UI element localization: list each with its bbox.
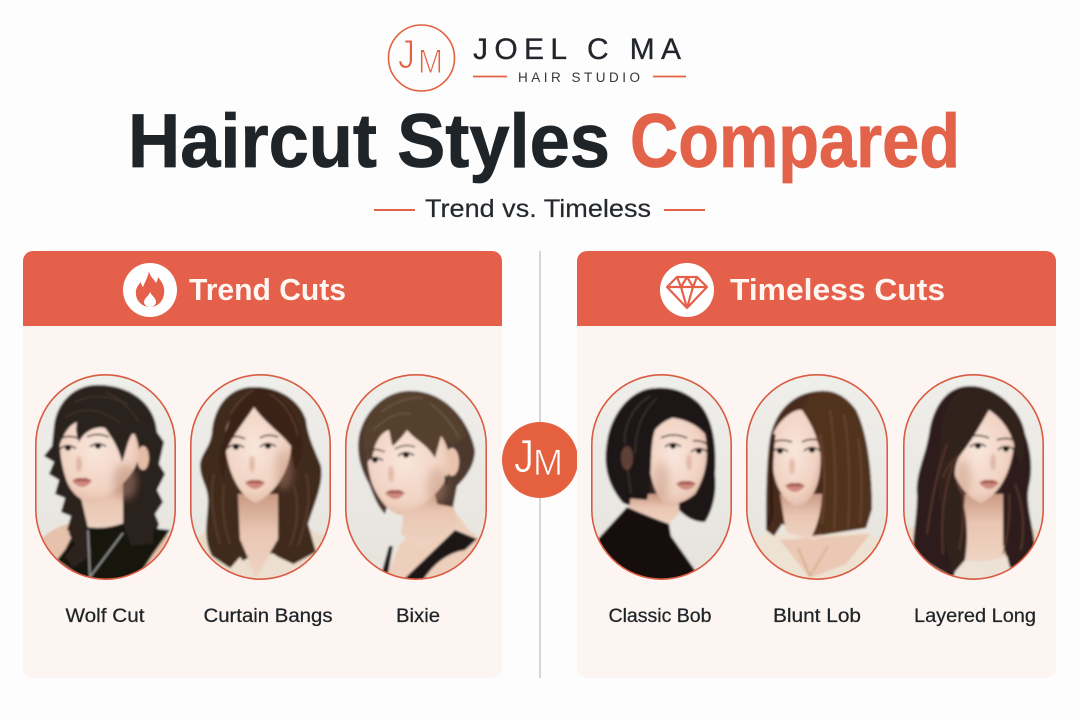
label: curtain bangs: Curtain Bangs [204,606,332,627]
panel: trend cuts [23,251,502,678]
icon: flame [123,263,177,317]
badge: JM monogram [502,422,578,498]
panel: timeless cuts [577,251,1056,678]
divider [539,251,541,678]
portrait: classic bob [591,374,732,580]
timeless header bar [577,251,1056,326]
badge: JM monogram: J [514,430,534,482]
logo name: JOEL C MA [473,33,681,66]
label: blunt lob: Blunt Lob [773,606,861,627]
label: layered long: Layered Long [914,606,1036,627]
title: Compared [630,99,960,184]
icon: diamond [660,263,714,317]
trend heading: Trend Cuts [189,273,346,307]
logo: Joel C Ma Hair Studio [388,25,686,91]
portrait: layered long [903,374,1044,580]
logo monogram [398,31,443,81]
title [128,99,960,184]
label: bixie: Bixie [396,606,440,627]
portrait: blunt lob [746,374,888,580]
logo monogram: M [418,43,443,81]
logo tagline: HAIR STUDIO [518,70,640,85]
badge: JM monogram: M [533,442,563,483]
portrait: bixie [345,374,487,580]
portrait: wolf cut [35,374,176,580]
label: classic bob: Classic Bob [608,606,712,627]
title: Haircut Styles [128,99,610,184]
logo monogram: J [398,31,415,77]
subtitle: Trend vs. Timeless [425,195,651,223]
portrait: curtain bangs [190,374,331,580]
label: wolf cut: Wolf Cut [66,606,145,627]
trend header bar [23,251,502,326]
timeless heading: Timeless Cuts [730,273,945,307]
